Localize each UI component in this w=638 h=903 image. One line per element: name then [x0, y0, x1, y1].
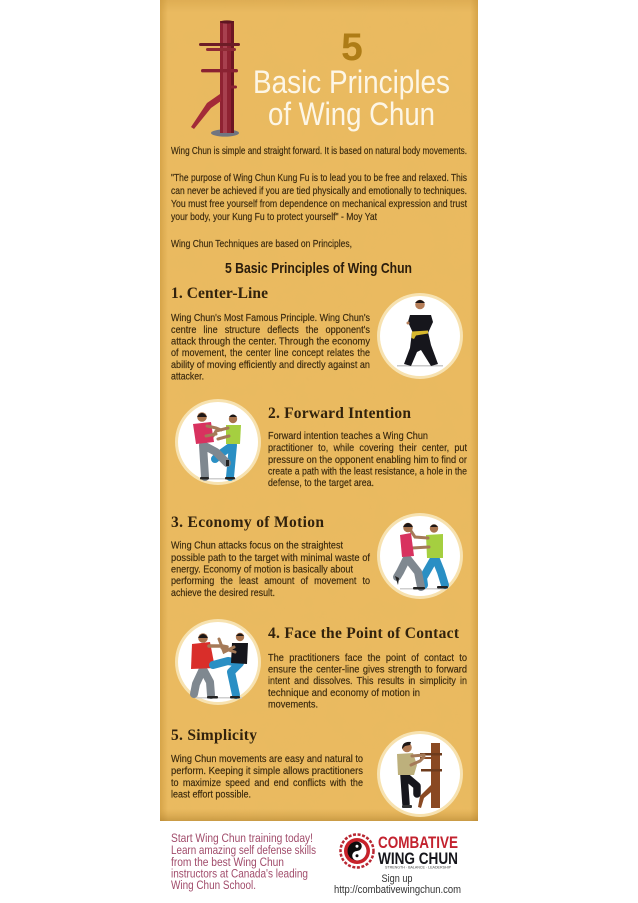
- text block: call to action: from the best Wing Chun: [171, 855, 284, 869]
- text block: introduction: your body, your Kung Fu to protect yourself" - Moy Yat: [171, 212, 377, 223]
- logo wordmark: WING CHUN: [378, 849, 458, 868]
- heading: 5 Basic Principles: 5 Basic Principles of Wing Chun: [225, 260, 412, 277]
- text block: Forward Intention description: pressure on the opponent enabling him to find or: [268, 455, 468, 466]
- title: 5: [341, 26, 363, 69]
- text block: introduction: [171, 146, 467, 250]
- icon: wooden dummy: [191, 20, 240, 137]
- text block: Center-Line description: Wing Chun's Most Famous Principle. Wing Chun's: [171, 313, 370, 324]
- logo wordmark: COMBATIVE: [378, 834, 458, 852]
- text block: Forward Intention description: Forward intention teaches a Wing Chun: [268, 431, 428, 442]
- panel: 5 Simplicity: [171, 727, 463, 817]
- text block: call to action: [171, 831, 316, 892]
- text block: Face the Point of Contact description: movements.: [268, 700, 318, 710]
- text block: Economy of Motion description: performing the least amount of movement to: [171, 576, 370, 587]
- text block: Center-Line description: ability of moving efficiently and directly against an: [171, 360, 370, 371]
- icon: yin-yang emblem: [340, 834, 374, 868]
- text block: Simplicity description: least effort possible.: [171, 790, 251, 800]
- text block: Face the Point of Contact description: [268, 653, 467, 710]
- text block: Simplicity description: to maximize speed and end conflicts with the: [171, 778, 363, 789]
- text block: call to action: Start Wing Chun training today!: [171, 831, 313, 845]
- text block: sign up link: [334, 873, 461, 896]
- text block: Center-Line description: of movement, the center line concept relates the: [171, 348, 370, 359]
- icon: two practitioners, face the point of contact: [175, 619, 261, 705]
- text block: Economy of Motion description: possible path to the target with minimal waste of: [171, 553, 370, 564]
- text block: Forward Intention description: [268, 431, 468, 489]
- text block: introduction: Wing Chun Techniques are based on Principles,: [171, 239, 352, 250]
- icon: two practitioners, economy of motion: [377, 513, 463, 599]
- text block: Face the Point of Contact description: The practitioners face the point of contact to: [268, 653, 467, 664]
- title: of Wing Chun: [268, 96, 435, 132]
- icon: practitioner at wooden dummy: [377, 731, 463, 817]
- text block: call to action: Learn amazing self defense skills: [171, 843, 316, 857]
- text block: call to action: instructors at Canada's leading: [171, 866, 308, 880]
- text block: Center-Line description: [171, 313, 371, 382]
- text block: Simplicity description: Wing Chun movements are easy and natural to: [171, 754, 363, 765]
- panel: 4 Face the Point of Contact: [175, 619, 467, 710]
- text block: Economy of Motion description: Wing Chun attacks focus on the straightest: [171, 540, 343, 552]
- text block: Center-Line description: attack through the center. Through the economy: [171, 336, 371, 348]
- icon: standing practitioner: [377, 293, 463, 379]
- title: Basic Principles: [253, 64, 450, 100]
- text block: Face the Point of Contact description: technique and economy of motion in: [268, 688, 420, 699]
- panel: 2 Forward Intention: [175, 399, 468, 489]
- heading: Economy of Motion: 3. Economy of Motion: [171, 514, 324, 531]
- text block: Economy of Motion description: [171, 540, 370, 599]
- panel: 1 Center-Line: [171, 285, 463, 382]
- text block: Forward Intention description: practitioner to, while covering their center, put: [268, 443, 467, 454]
- text block: Simplicity description: [171, 754, 363, 800]
- icon: school logo: [340, 834, 458, 870]
- heading: Forward Intention: 2. Forward Intention: [268, 405, 411, 422]
- text block: Economy of Motion description: energy. Economy of motion is basically about: [171, 564, 353, 576]
- title: [253, 26, 450, 132]
- logo wordmark: [378, 834, 458, 870]
- panel: parchment background: [160, 0, 478, 821]
- text block: Face the Point of Contact description: ensure the center-line gives strength to forward: [268, 664, 467, 676]
- text block: Face the Point of Contact description: intent and dissolves. This results in simplicity in: [268, 676, 467, 687]
- text block: sign up link: Sign up: [382, 873, 412, 885]
- icon: two practitioners, forward intention: [175, 399, 261, 485]
- text block: Economy of Motion description: achieve the desired result.: [171, 588, 275, 599]
- text block: sign up link: http://combativewingchun.com: [334, 884, 461, 896]
- heading: Center-Line: 1. Center-Line: [171, 285, 268, 302]
- text block: introduction: "The purpose of Wing Chun Kung Fu is to lead you to be free and relaxed. This: [171, 173, 467, 184]
- logo wordmark: STRENGTH · BALANCE · LEADERSHIP: [385, 866, 452, 870]
- text block: introduction: can never be achieved if you are tied physically and emotionally to techniques.: [171, 186, 467, 197]
- heading: Simplicity: 5. Simplicity: [171, 727, 257, 744]
- text block: Center-Line description: centre line structure deflects the opponent's: [171, 325, 370, 336]
- text block: Forward Intention description: create a path with the least resistance, a hole in the: [268, 466, 467, 478]
- text block: Center-Line description: attacker.: [171, 372, 204, 382]
- text block: call to action: Wing Chun School.: [171, 878, 256, 892]
- text block: introduction: You must free yourself from dependence on mechanical expression and trust: [171, 199, 467, 210]
- text block: Simplicity description: perform. Keeping it simple allows practitioners: [171, 766, 363, 777]
- heading: Face the Point of Contact: 4. Face the Point of Contact: [268, 625, 460, 642]
- text block: introduction: Wing Chun is simple and straight forward. It is based on natural body movements.: [171, 146, 467, 157]
- panel: 3 Economy of Motion: [171, 513, 463, 599]
- text block: Forward Intention description: defense, to the target area.: [268, 478, 374, 489]
